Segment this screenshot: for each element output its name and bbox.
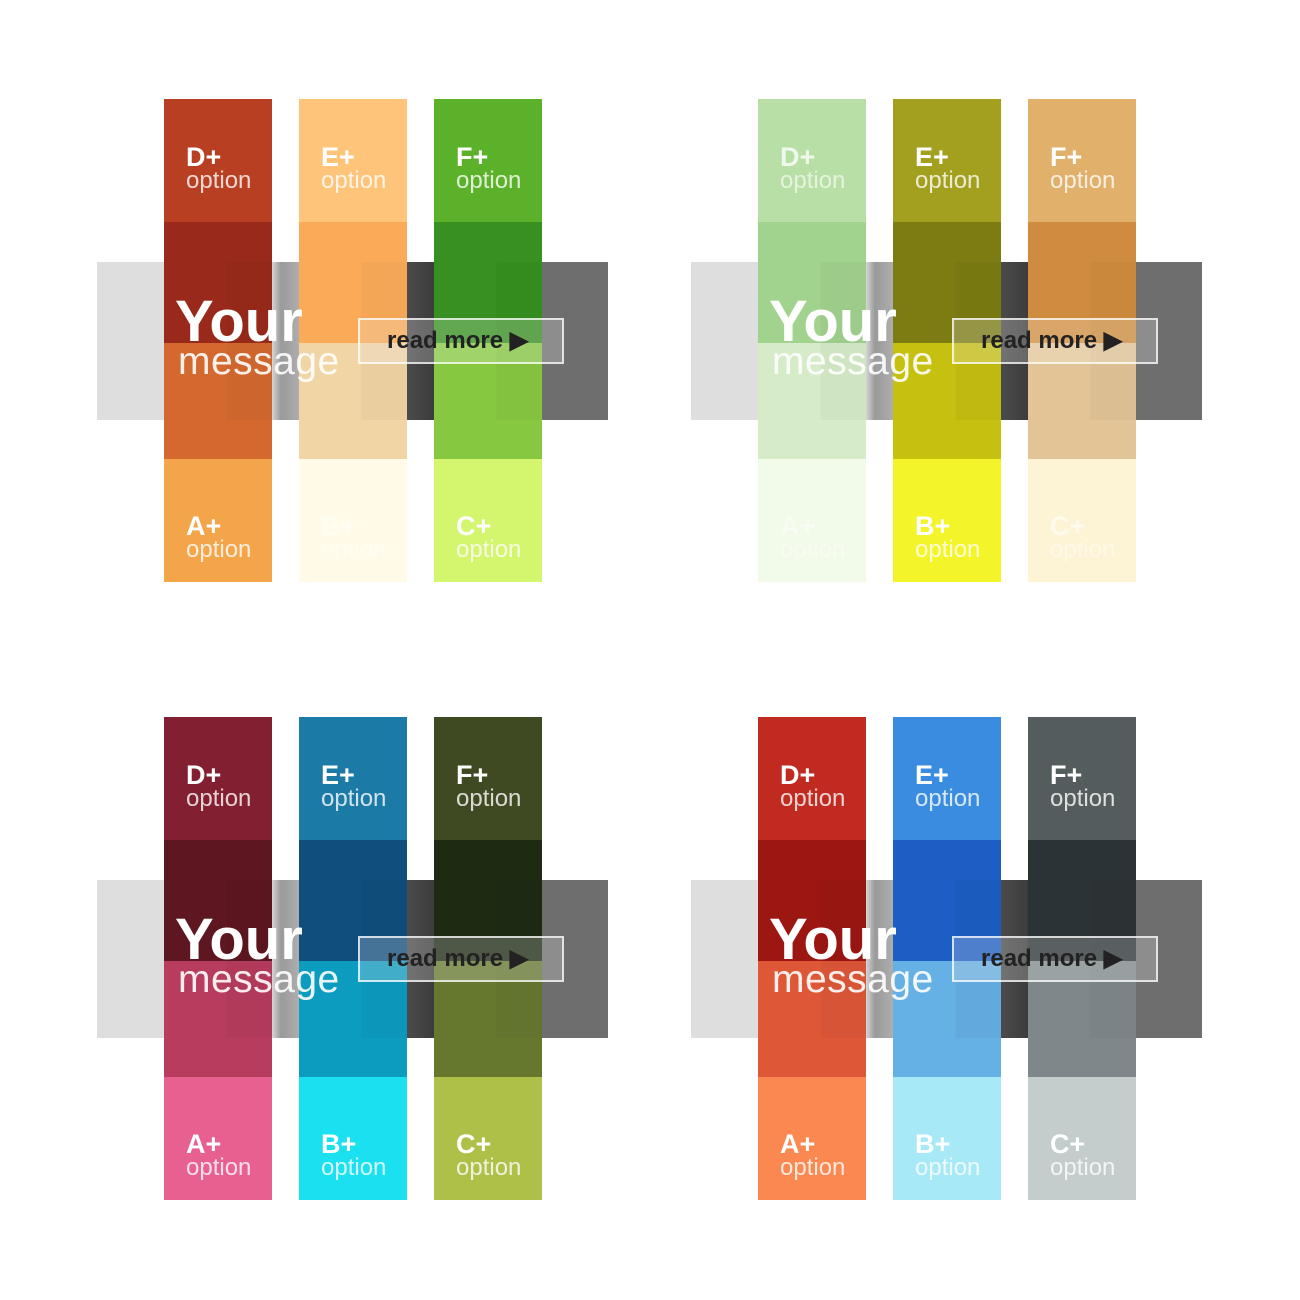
panel: bottom-left burgundy/blue/olive [97,717,608,1200]
column D/A [758,99,866,582]
column D/A: A+ [780,1129,815,1159]
column F/C: C+ [456,1129,491,1159]
column E/B: option [321,1154,386,1181]
column E/B: option [915,167,980,194]
column E/B: E+ [915,142,949,172]
heading: Your [769,289,897,354]
column F/C: C+ [1050,1129,1085,1159]
column E/B: B+ [915,1129,950,1159]
column F/C: C+ [456,511,491,541]
column E/B: B+ [321,511,356,541]
column F/C: F+ [456,142,488,172]
column E/B [299,99,407,582]
panel: bottom-left burgundy/blue/olive: message [178,958,340,1001]
column F/C: F+ [456,760,488,790]
column F/C: option [456,167,521,194]
panel: top-right pastel [691,99,1202,582]
heading: Your [769,907,897,972]
column D/A: D+ [186,760,221,790]
panel: bottom-right red/blue/grey [691,717,1202,1200]
column F/C: option [456,785,521,812]
panel: bottom-right red/blue/grey: message [772,958,934,1001]
heading: Your [175,289,303,354]
column F/C: option [456,1154,521,1181]
column F/C [434,717,542,1200]
column D/A: D+ [186,142,221,172]
column F/C: F+ [1050,760,1082,790]
button: read more: read more ▶ [387,327,528,354]
column F/C: C+ [1050,511,1085,541]
column D/A: option [780,167,845,194]
column E/B: B+ [321,1129,356,1159]
button: read more: read more ▶ [981,327,1122,354]
column E/B [893,717,1001,1200]
column F/C [434,99,542,582]
button: read more: read more ▶ [387,945,528,972]
column F/C: option [1050,536,1115,563]
column E/B: option [915,1154,980,1181]
column D/A: A+ [186,511,221,541]
column E/B: option [915,785,980,812]
column D/A: D+ [780,142,815,172]
button: read more [358,318,564,364]
button: read more [952,318,1158,364]
column D/A: option [186,536,251,563]
column E/B: B+ [915,511,950,541]
column E/B: E+ [321,760,355,790]
button: read more: read more ▶ [981,945,1122,972]
column F/C: F+ [1050,142,1082,172]
column D/A: A+ [186,1129,221,1159]
column D/A [164,99,272,582]
column D/A: D+ [780,760,815,790]
column D/A: option [186,1154,251,1181]
column E/B [299,717,407,1200]
column E/B: option [321,536,386,563]
column E/B: option [915,536,980,563]
column E/B: option [321,167,386,194]
column E/B [893,99,1001,582]
button: read more [952,936,1158,982]
column E/B: E+ [915,760,949,790]
panel: top-left orange/green [97,99,608,582]
column D/A: A+ [780,511,815,541]
column E/B: option [321,785,386,812]
column F/C: option [1050,1154,1115,1181]
column D/A [758,717,866,1200]
column F/C: option [1050,785,1115,812]
column D/A: option [186,167,251,194]
column F/C: option [456,536,521,563]
button: read more [358,936,564,982]
heading: Your [175,907,303,972]
column F/C [1028,99,1136,582]
column F/C [1028,717,1136,1200]
column E/B: E+ [321,142,355,172]
panel: top-right pastel: message [772,340,934,383]
column F/C: option [1050,167,1115,194]
column D/A: option [186,785,251,812]
column D/A: option [780,1154,845,1181]
column D/A [164,717,272,1200]
column D/A: option [780,536,845,563]
panel: top-left orange/green: message [178,340,340,383]
column D/A: option [780,785,845,812]
